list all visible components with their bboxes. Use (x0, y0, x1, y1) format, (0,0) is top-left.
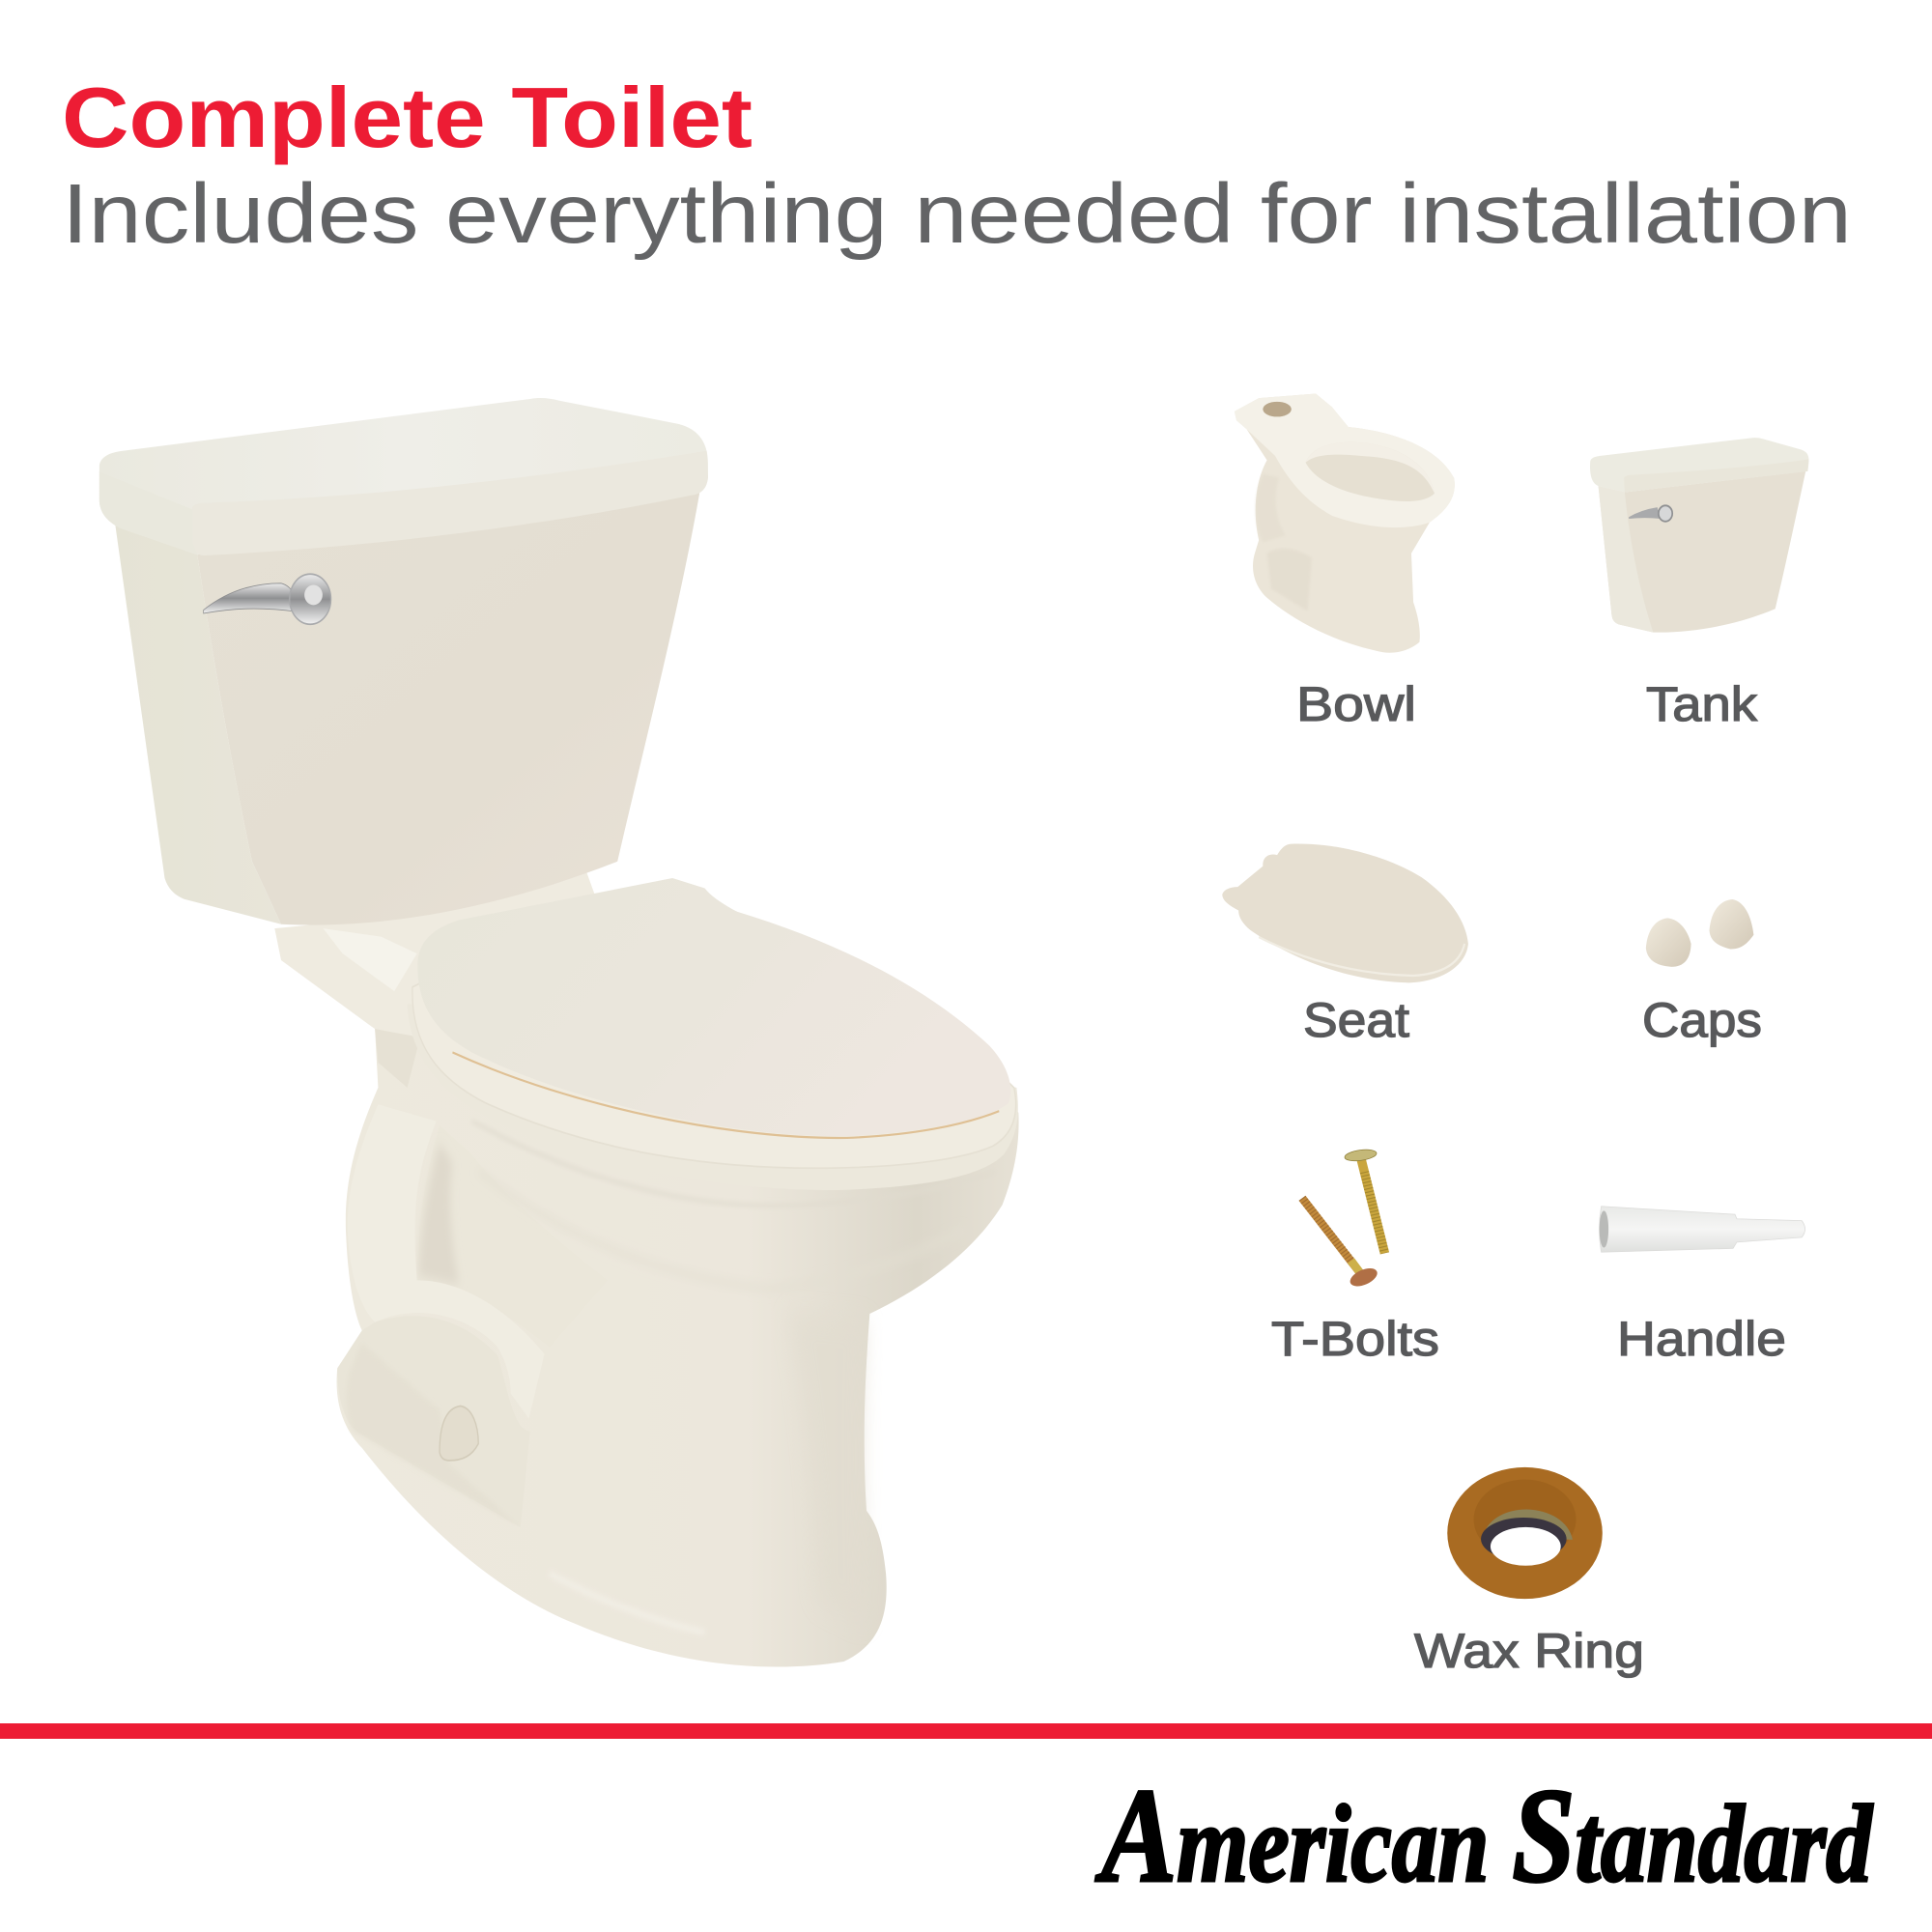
seat lid (417, 878, 1010, 1136)
base highlight (550, 1574, 705, 1633)
seat hinge shadow (375, 1029, 420, 1088)
seat ring (412, 970, 1016, 1168)
bowl body (337, 1020, 1019, 1667)
trapway cavity (417, 1125, 608, 1348)
part: tank (1590, 438, 1809, 633)
logo: American Standard: American Standard (1094, 1761, 1874, 1911)
rim (408, 1004, 1018, 1190)
part: caps (1646, 899, 1753, 967)
label: Seat: Seat (1303, 993, 1409, 1047)
label: Handle: Handle (1617, 1312, 1786, 1366)
label: Tank: Tank (1646, 677, 1758, 731)
tank lid front band (192, 451, 708, 555)
seat orange edge (452, 1052, 999, 1138)
bolt cap (440, 1406, 478, 1461)
base recess (337, 1316, 530, 1527)
part: wax ring (1447, 1467, 1603, 1599)
main image: assembled toilet (99, 398, 1019, 1667)
tank lid (99, 398, 708, 554)
label: Bowl: Bowl (1296, 677, 1416, 731)
red divider bar (0, 1723, 1932, 1739)
trapway ridge (348, 1104, 545, 1418)
flush handle (204, 574, 331, 624)
part: seat (1222, 844, 1468, 982)
title: Complete Toilet: Complete Toilet (62, 70, 753, 165)
label: Caps: Caps (1642, 993, 1762, 1047)
label: T-Bolts: T-Bolts (1271, 1312, 1439, 1366)
label: Wax Ring: Wax Ring (1414, 1624, 1644, 1678)
part: T-bolts (1302, 1148, 1384, 1290)
part: handle sleeve (1600, 1207, 1805, 1252)
subtitle: Includes everything needed for installation (62, 167, 1852, 261)
tank body front (197, 493, 699, 925)
deck connecting tank (274, 868, 595, 1046)
part: bowl (1235, 394, 1455, 653)
tank side facet (115, 522, 281, 924)
